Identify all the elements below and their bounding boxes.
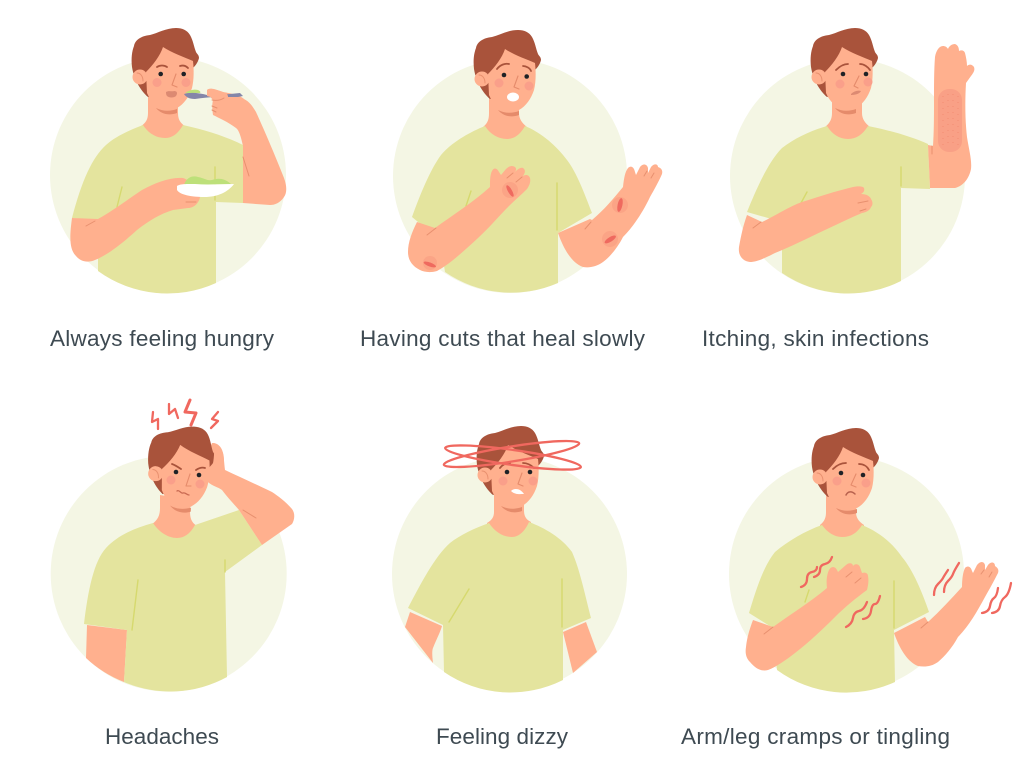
spoon (185, 90, 200, 93)
cut on elbow (423, 256, 437, 270)
t-shirt (749, 525, 929, 693)
label: always feeling hungry: Always feeling hungry (50, 326, 275, 351)
background circle (392, 456, 627, 692)
raised arm with rash (928, 44, 974, 188)
dizzy rings (443, 436, 582, 474)
arm holding plate (70, 176, 234, 262)
cut on wrist (612, 197, 628, 213)
t-shirt (412, 126, 592, 293)
background circle (730, 58, 965, 294)
t-shirt (84, 510, 262, 691)
pain bolts (152, 400, 218, 429)
head (477, 426, 544, 512)
background circle (50, 57, 286, 293)
label: itching: Itching, skin infections (702, 326, 929, 351)
neck (825, 95, 870, 144)
cut on hand (502, 182, 518, 198)
left arm with cuts (408, 166, 530, 272)
fingers over hair (208, 443, 224, 482)
background circle (729, 456, 964, 692)
neck (141, 95, 185, 144)
head (132, 28, 199, 114)
background circle (51, 456, 287, 692)
head (145, 424, 224, 514)
head (474, 30, 541, 116)
mouth: white teeth (511, 489, 524, 494)
neck (483, 95, 527, 144)
t-shirt (72, 125, 243, 294)
arms hanging (405, 612, 597, 673)
left arm on chest (746, 563, 868, 671)
neck (820, 495, 864, 542)
panel: itching, skin infections (730, 28, 974, 294)
label: cramps or tingling: Arm/leg cramps or tingling (681, 724, 950, 749)
rash patch (938, 89, 962, 152)
mouth: open white (507, 92, 519, 102)
right arm with cuts (558, 164, 662, 267)
panel: having cuts that heal slowly (393, 30, 662, 293)
right arm raised (894, 562, 998, 667)
background circle (393, 59, 627, 293)
t-shirt (747, 126, 930, 293)
panel: feeling dizzy (392, 426, 627, 692)
arm across body (739, 186, 872, 262)
raised arm behind head (204, 443, 294, 545)
t-shirt (408, 522, 591, 692)
neck (487, 495, 531, 542)
lowered arm (86, 625, 127, 682)
label: feeling dizzy: Feeling dizzy (436, 724, 569, 749)
cut on forearm (602, 231, 618, 247)
tingling waves (801, 557, 1011, 627)
label: having cuts: Having cuts that heal slowly (360, 326, 646, 351)
panel: headaches (51, 400, 294, 692)
raised arm with spoon (184, 89, 286, 205)
label: headaches: Headaches (105, 724, 219, 749)
head (811, 28, 878, 114)
food (184, 176, 231, 185)
panel: arm/leg cramps or tingling (729, 428, 1011, 693)
head (812, 428, 879, 514)
neck (152, 495, 197, 542)
panel: always feeling hungry (50, 28, 286, 294)
plate (177, 184, 234, 197)
